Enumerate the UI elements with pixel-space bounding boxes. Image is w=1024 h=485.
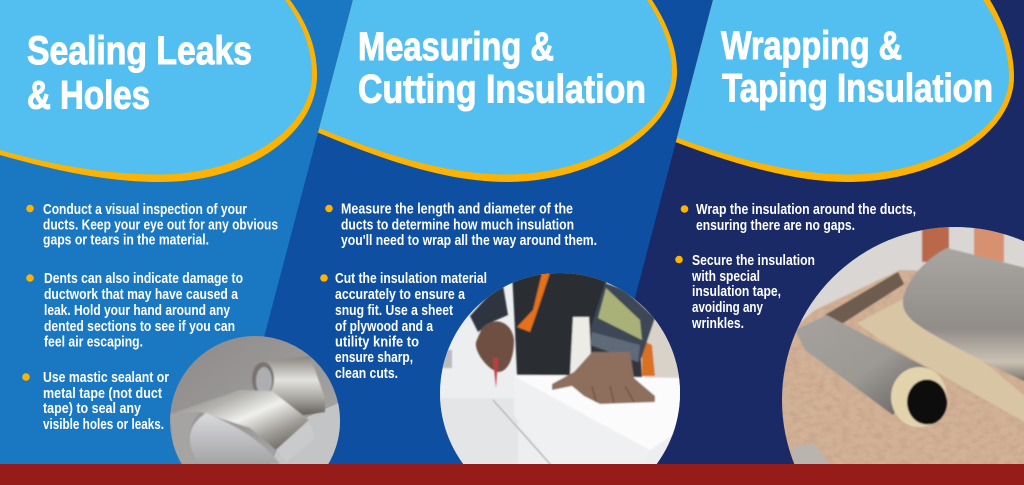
bullet 3: mastic sealant — [22, 370, 169, 433]
bullet 2: secure the insulation — [675, 253, 815, 332]
bullet 2: dents: dented sections to see if you can — [44, 319, 235, 335]
panel: measuring and cutting insulation — [264, 0, 713, 464]
large tape roll — [170, 390, 315, 464]
bullet 2: cut the insulation: accurately to ensure a — [335, 287, 466, 303]
bullet 1: measure ducts: you'll need to wrap all the way around them. — [341, 233, 597, 249]
bullet list: measuring — [320, 202, 597, 382]
bullet 2: cut the insulation: of plywood and a — [335, 319, 434, 335]
bullet 3: mastic sealant: Use mastic sealant or — [43, 370, 169, 386]
header blob: wrapping — [660, 0, 1014, 182]
heading: measuring and cutting insulation: Measuring & — [358, 25, 554, 69]
bullet 2: cut the insulation — [320, 271, 487, 382]
heading: sealing leaks and holes — [27, 29, 252, 118]
photo: insulated ducts on floor — [780, 226, 1024, 466]
bullet 2: dents: ductwork that may have caused a — [44, 287, 239, 303]
panel: wrapping and taping insulation — [634, 0, 1024, 464]
bullet 3: mastic sealant: tape) to seal any — [43, 401, 141, 417]
bullet 1: wrap the insulation: ensuring there are no gaps. — [696, 218, 855, 234]
heading: wrapping and taping insulation: Wrapping & — [721, 24, 902, 68]
heading: sealing leaks and holes: Sealing Leaks — [27, 29, 252, 73]
worker torso — [512, 272, 610, 375]
bullet 1: visual inspection: Conduct a visual inspection of your — [43, 202, 247, 218]
bullet 2: cut the insulation: ensure sharp, — [335, 350, 413, 366]
right hand — [552, 352, 655, 404]
bullet 2: cut the insulation: snug fit. Use a sheet — [335, 303, 453, 319]
bullet list: sealing — [22, 202, 278, 433]
header blob: measuring — [300, 0, 677, 182]
left sleeve — [470, 285, 508, 332]
bullet 2: secure the insulation: Secure the insulation — [692, 253, 815, 269]
header blob: sealing — [0, 0, 317, 182]
bullet 2: dents: feel air escaping. — [44, 334, 143, 350]
large wrapped duct — [903, 248, 1024, 382]
bullet 1: measure ducts: Measure the length and diameter of the — [341, 202, 573, 218]
left hand and pencil — [476, 321, 514, 388]
footer bar — [0, 464, 1024, 485]
bullet 1: measure ducts: ducts to determine how much insulation — [341, 218, 574, 234]
heading: sealing leaks and holes: & Holes — [27, 74, 150, 118]
heading: measuring and cutting insulation: Cutting Insulation — [358, 68, 646, 112]
photo: metal foil tape rolls — [170, 336, 345, 466]
bullet 1: visual inspection — [26, 202, 278, 248]
connector pipe — [825, 272, 904, 325]
bullet 1: wrap the insulation: Wrap the insulation around the ducts, — [696, 202, 916, 218]
bullet 1: visual inspection: gaps or tears in the material. — [43, 232, 209, 248]
bullet 3: mastic sealant: visible holes or leaks. — [43, 417, 164, 433]
bullet 1: visual inspection: ducts. Keep your eye out for any obvious — [43, 218, 278, 234]
heading: measuring and cutting insulation — [358, 25, 646, 112]
bullet 2: secure the insulation: avoiding any — [692, 300, 763, 316]
right sleeve and patch — [590, 283, 655, 362]
bullet 2: cut the insulation: utility knife to — [335, 334, 419, 350]
insulation board on floor — [857, 297, 1024, 423]
bullet 1: measure ducts — [325, 202, 597, 249]
heading: wrapping and taping insulation — [721, 24, 993, 110]
bullet 2: secure the insulation: wrinkles. — [691, 316, 744, 332]
bullet 2: dents: leak. Hold your hand around any — [44, 303, 230, 319]
bullet list: wrapping — [675, 202, 916, 332]
bullet 2: dents: Dents can also indicate damage to — [44, 271, 243, 287]
bullet 3: mastic sealant: metal tape (not duct — [43, 386, 162, 402]
bullet 2: cut the insulation: Cut the insulation material — [335, 271, 487, 287]
bullet 2: secure the insulation: with special — [691, 269, 760, 285]
insulation board — [438, 375, 685, 470]
copper pipes — [922, 226, 1004, 262]
small tape roll — [252, 356, 325, 416]
orange stripe — [517, 273, 550, 332]
photo: worker marking insulation board — [438, 272, 685, 470]
bullet 2: dents — [26, 271, 243, 350]
small wrapped duct — [795, 315, 947, 427]
bullet 1: wrap the insulation — [681, 202, 916, 234]
bullet 2: cut the insulation: clean cuts. — [335, 366, 398, 382]
bullet 2: secure the insulation: insulation tape, — [692, 284, 781, 300]
